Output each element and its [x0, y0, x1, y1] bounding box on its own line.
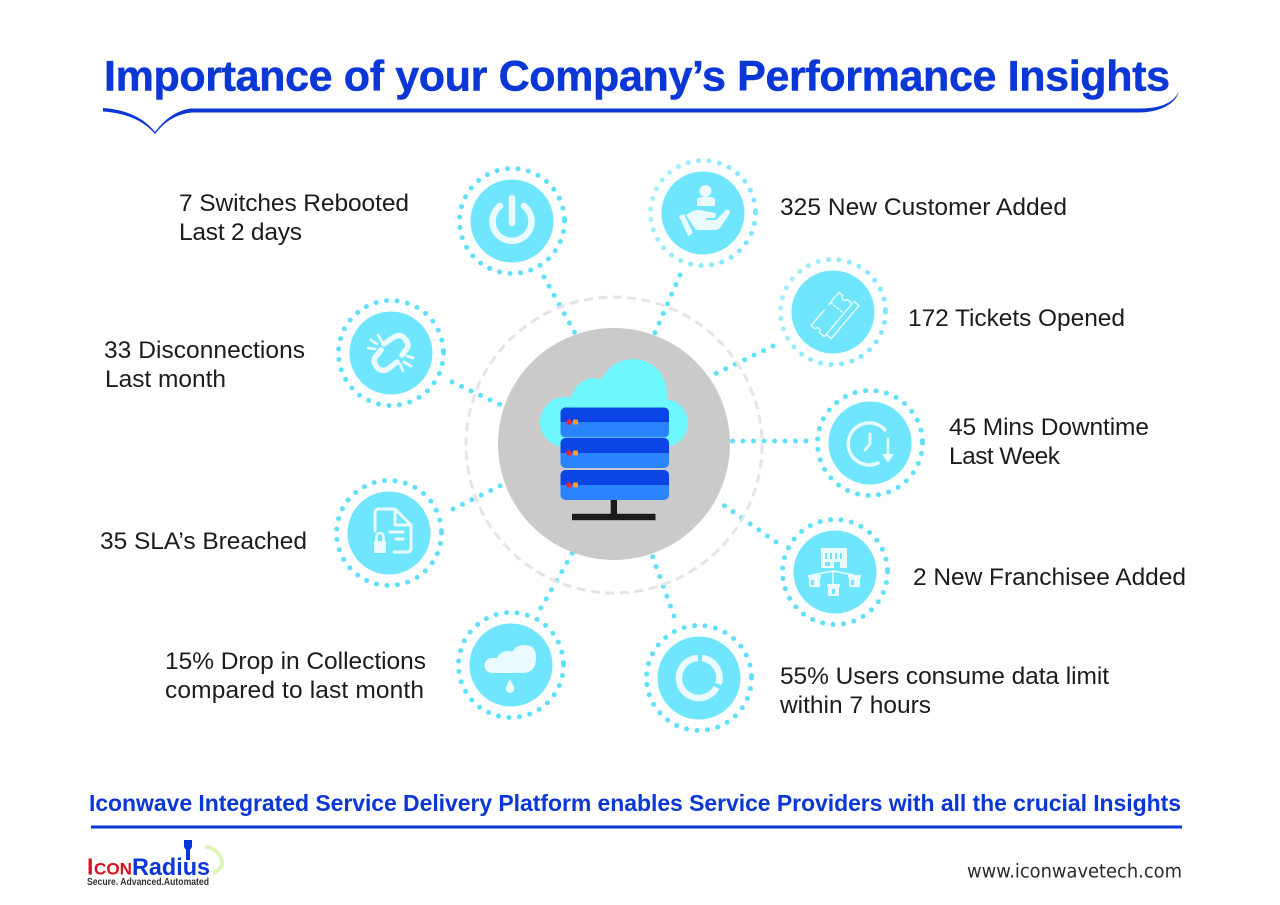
label: disconnections: [104, 337, 305, 393]
label: downtime: 45 Mins Downtime: [949, 414, 1149, 441]
icon: server stack: [560, 408, 669, 520]
icon: franchise network: [782, 520, 888, 624]
icon: broken link: [338, 300, 444, 406]
icon: rain cloud: [458, 612, 564, 718]
label: downtime: [949, 414, 1149, 470]
label: switches rebooted: 7 Switches Rebooted: [179, 190, 409, 217]
label: downtime: Last Week: [949, 443, 1061, 470]
label: collections drop: 15% Drop in Collections: [165, 648, 426, 675]
label: disconnections: 33 Disconnections: [104, 337, 305, 364]
icon: customer in hand: [650, 160, 756, 266]
label: collections drop: [165, 648, 426, 704]
connectors: [452, 275, 806, 616]
footer rule: [91, 826, 1182, 828]
label: data limit: within 7 hours: [779, 692, 931, 719]
logo: IconRadius: I: [87, 854, 93, 880]
footer statement: Iconwave Integrated Service Delivery Platform enables Service Providers with all the crucial Insights: [89, 790, 1181, 816]
logo: IconRadius: Secure. Advanced.Automated: [87, 877, 209, 888]
label: new customers: 325 New Customer Added: [780, 194, 1067, 221]
label: data limit: [779, 663, 1109, 719]
icon: power: [460, 168, 564, 274]
label: switches rebooted: [179, 190, 409, 246]
website url: www.iconwavetech.com: [967, 862, 1182, 882]
logo: IconRadius: [87, 840, 222, 888]
title: Importance of your Company’s Performance Insights: [104, 52, 1170, 100]
label: franchisee: 2 New Franchisee Added: [913, 564, 1186, 591]
icon: donut chart: [646, 626, 752, 730]
label: SLA breached: 35 SLA’s Breached: [100, 528, 307, 555]
logo: IconRadius: Radius: [132, 854, 210, 881]
logo: IconRadius: CON: [94, 860, 132, 878]
title underline: [103, 91, 1179, 134]
icon: document with lock: [336, 480, 442, 586]
label: collections drop: compared to last month: [165, 677, 424, 704]
label: tickets opened: 172 Tickets Opened: [908, 305, 1125, 332]
icon: cloud: [540, 359, 688, 447]
label: data limit: 55% Users consume data limit: [780, 663, 1109, 690]
icon: clock with down arrow: [818, 390, 922, 496]
icon: tickets: [780, 260, 886, 364]
label: disconnections: Last month: [105, 366, 226, 393]
label: switches rebooted: Last 2 days: [179, 219, 302, 246]
central hub: [466, 297, 762, 593]
